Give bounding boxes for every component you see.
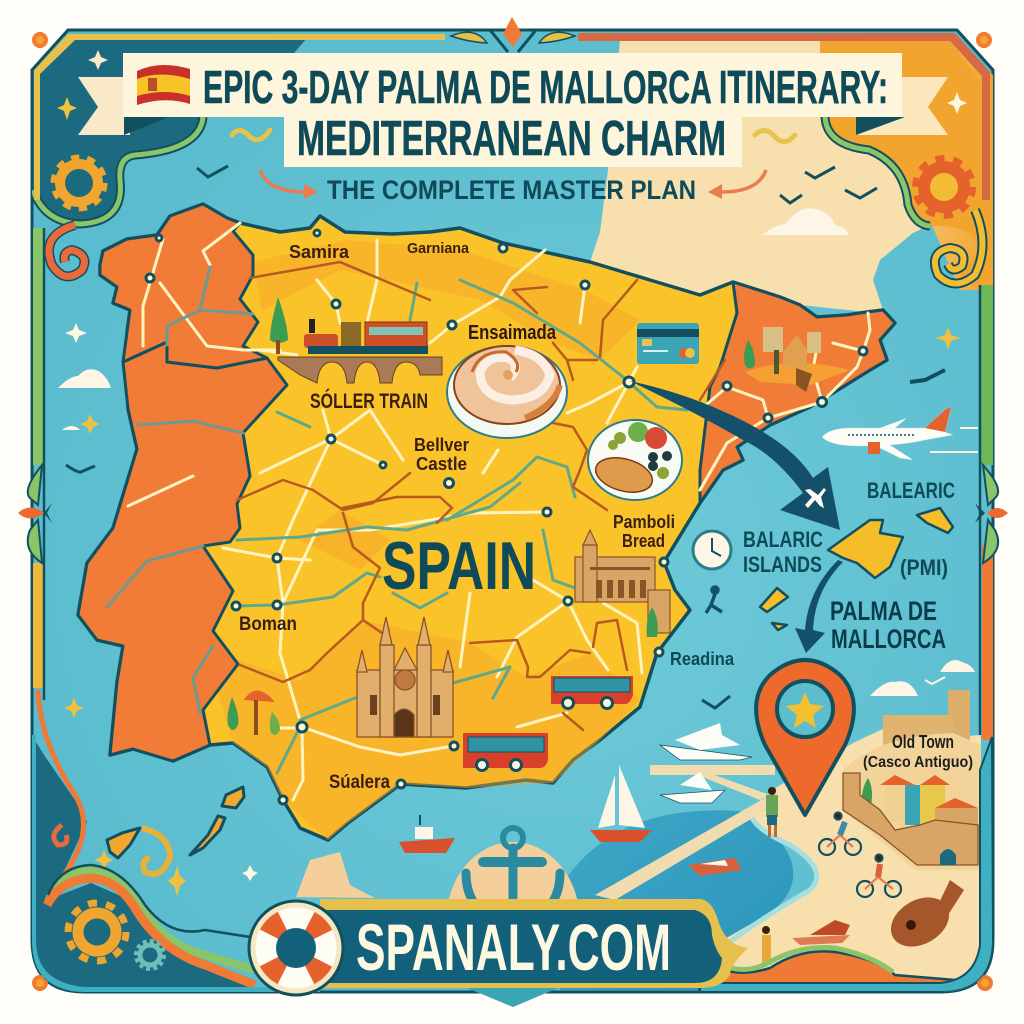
Galicia xyxy=(100,204,267,368)
icon: walker xyxy=(706,587,722,613)
label: Ensaimada: Ensaimada xyxy=(468,322,557,344)
label: Pamboli bread xyxy=(613,512,675,551)
ribbon folds xyxy=(124,117,905,135)
label: Old Town xyxy=(863,732,973,771)
scene: harbour and beach xyxy=(33,690,993,992)
title banner xyxy=(78,53,948,167)
Catalonia xyxy=(700,282,895,503)
bay xyxy=(560,810,793,990)
icon: Catalonia buildings xyxy=(744,327,850,392)
Portugal xyxy=(78,342,287,761)
orange top right gradient xyxy=(932,43,993,290)
labels: Balearic xyxy=(743,478,955,580)
icon: ximbomba instrument xyxy=(891,880,964,947)
top bands xyxy=(34,34,445,200)
place labels xyxy=(239,240,735,793)
side ornament right xyxy=(975,465,1008,563)
Balearic islands xyxy=(760,508,953,630)
subtitle: THE COMPLETE MASTER PLAN xyxy=(327,175,696,205)
yellow swirl xyxy=(142,828,170,874)
swirl: left xyxy=(49,225,84,276)
rivers xyxy=(107,267,687,773)
label: Palma de Mallorca: MALLORCA xyxy=(831,624,946,654)
icon: beach people xyxy=(762,787,850,965)
castle hill town xyxy=(948,690,970,740)
bottom left corner xyxy=(33,737,253,992)
land north: France xyxy=(590,41,922,312)
icon: pamboli plate xyxy=(588,420,682,500)
orange tone patches xyxy=(205,240,640,840)
title text: MEDITERRANEAN CHARM xyxy=(297,112,726,166)
swirl: right xyxy=(935,210,982,284)
Spain land xyxy=(78,204,895,840)
bottom rainbow wave xyxy=(698,950,956,990)
arrow to Palma xyxy=(795,560,843,653)
labels: Balearic: (PMI) xyxy=(900,555,948,580)
place labels: Readina xyxy=(670,649,735,669)
icon: gear top left xyxy=(54,158,104,208)
icon: castle xyxy=(575,530,670,637)
icon: clouds xyxy=(58,208,975,696)
icon: Spanish flag xyxy=(137,65,190,105)
icon: trees xyxy=(228,690,280,735)
swirl small left xyxy=(54,825,67,845)
icon: cathedral xyxy=(357,617,453,737)
road network xyxy=(128,223,870,800)
road nodes xyxy=(146,230,867,804)
website banner xyxy=(320,899,748,988)
pier xyxy=(595,795,778,900)
icon: train on bridge xyxy=(270,297,442,383)
right corner fill xyxy=(820,41,983,289)
icon: life ring xyxy=(249,901,343,995)
icon: airplane xyxy=(822,407,978,460)
left border bands xyxy=(33,228,44,465)
icon: bottom gears xyxy=(68,903,164,969)
icon: ensaimada xyxy=(447,346,567,438)
icon: small plane xyxy=(805,488,826,508)
borders xyxy=(237,262,725,730)
label: Bellver Castle: Bellver xyxy=(414,435,469,455)
place labels: Samira xyxy=(289,242,350,262)
left corner dark block xyxy=(33,38,307,223)
title text xyxy=(203,61,888,166)
banner plates xyxy=(123,53,902,167)
panel: frame ornaments xyxy=(32,30,993,740)
labels: Balearic: BALEARIC xyxy=(867,478,955,503)
yellow squiggles xyxy=(232,130,795,142)
icon: gear top right xyxy=(916,159,972,215)
icon: sailboat xyxy=(590,765,652,842)
arrow to Balearic Islands xyxy=(630,381,840,530)
icon: lower bus xyxy=(463,733,548,770)
anchor xyxy=(455,828,570,1007)
place labels: Súalera xyxy=(329,772,390,793)
labels: Balearic: ISLANDS xyxy=(743,552,822,577)
label: Old Town: (Casco Antiguo) xyxy=(863,754,973,771)
icon: birds xyxy=(66,166,945,708)
label: Old Town: Old Town xyxy=(892,732,954,752)
icon: yachts xyxy=(660,723,752,803)
map of Iberia xyxy=(78,204,895,840)
ribbon left xyxy=(78,77,130,135)
label: Bellver Castle xyxy=(414,435,469,474)
icon: clock xyxy=(693,531,731,569)
sand xyxy=(727,728,981,992)
icon: cyclists xyxy=(819,812,901,897)
label: Bellver Castle: Castle xyxy=(416,454,467,474)
label: Pamboli bread: Pamboli xyxy=(613,512,675,532)
label: Palma de Mallorca xyxy=(830,596,946,654)
ribbon right xyxy=(856,77,948,135)
place labels: Boman xyxy=(239,614,297,635)
sand island south xyxy=(296,852,375,898)
icon: upper bus xyxy=(551,676,633,708)
icon: credit card xyxy=(637,323,699,364)
icon: speedboat xyxy=(688,858,742,876)
label: Palma de Mallorca: PALMA DE xyxy=(830,596,937,626)
label: SPAIN: SPAIN xyxy=(382,528,536,604)
pin marker xyxy=(756,660,854,815)
islands southwest xyxy=(107,787,244,858)
label: Sóller train: SÓLLER TRAIN xyxy=(310,389,428,413)
stars and sparkles xyxy=(57,50,967,958)
bottom right teal corner xyxy=(700,737,993,992)
place labels: Garniana xyxy=(407,240,470,257)
walls xyxy=(843,773,978,865)
label: Pamboli bread: Bread xyxy=(622,531,665,551)
top ornament xyxy=(451,17,575,52)
website banner: SPANALY.COM xyxy=(356,910,671,984)
small boat xyxy=(399,815,455,853)
right border bands xyxy=(981,285,993,465)
side ornament left xyxy=(18,465,52,563)
anchor back xyxy=(446,842,580,1002)
labels: Balearic: BALARIC xyxy=(743,527,823,552)
